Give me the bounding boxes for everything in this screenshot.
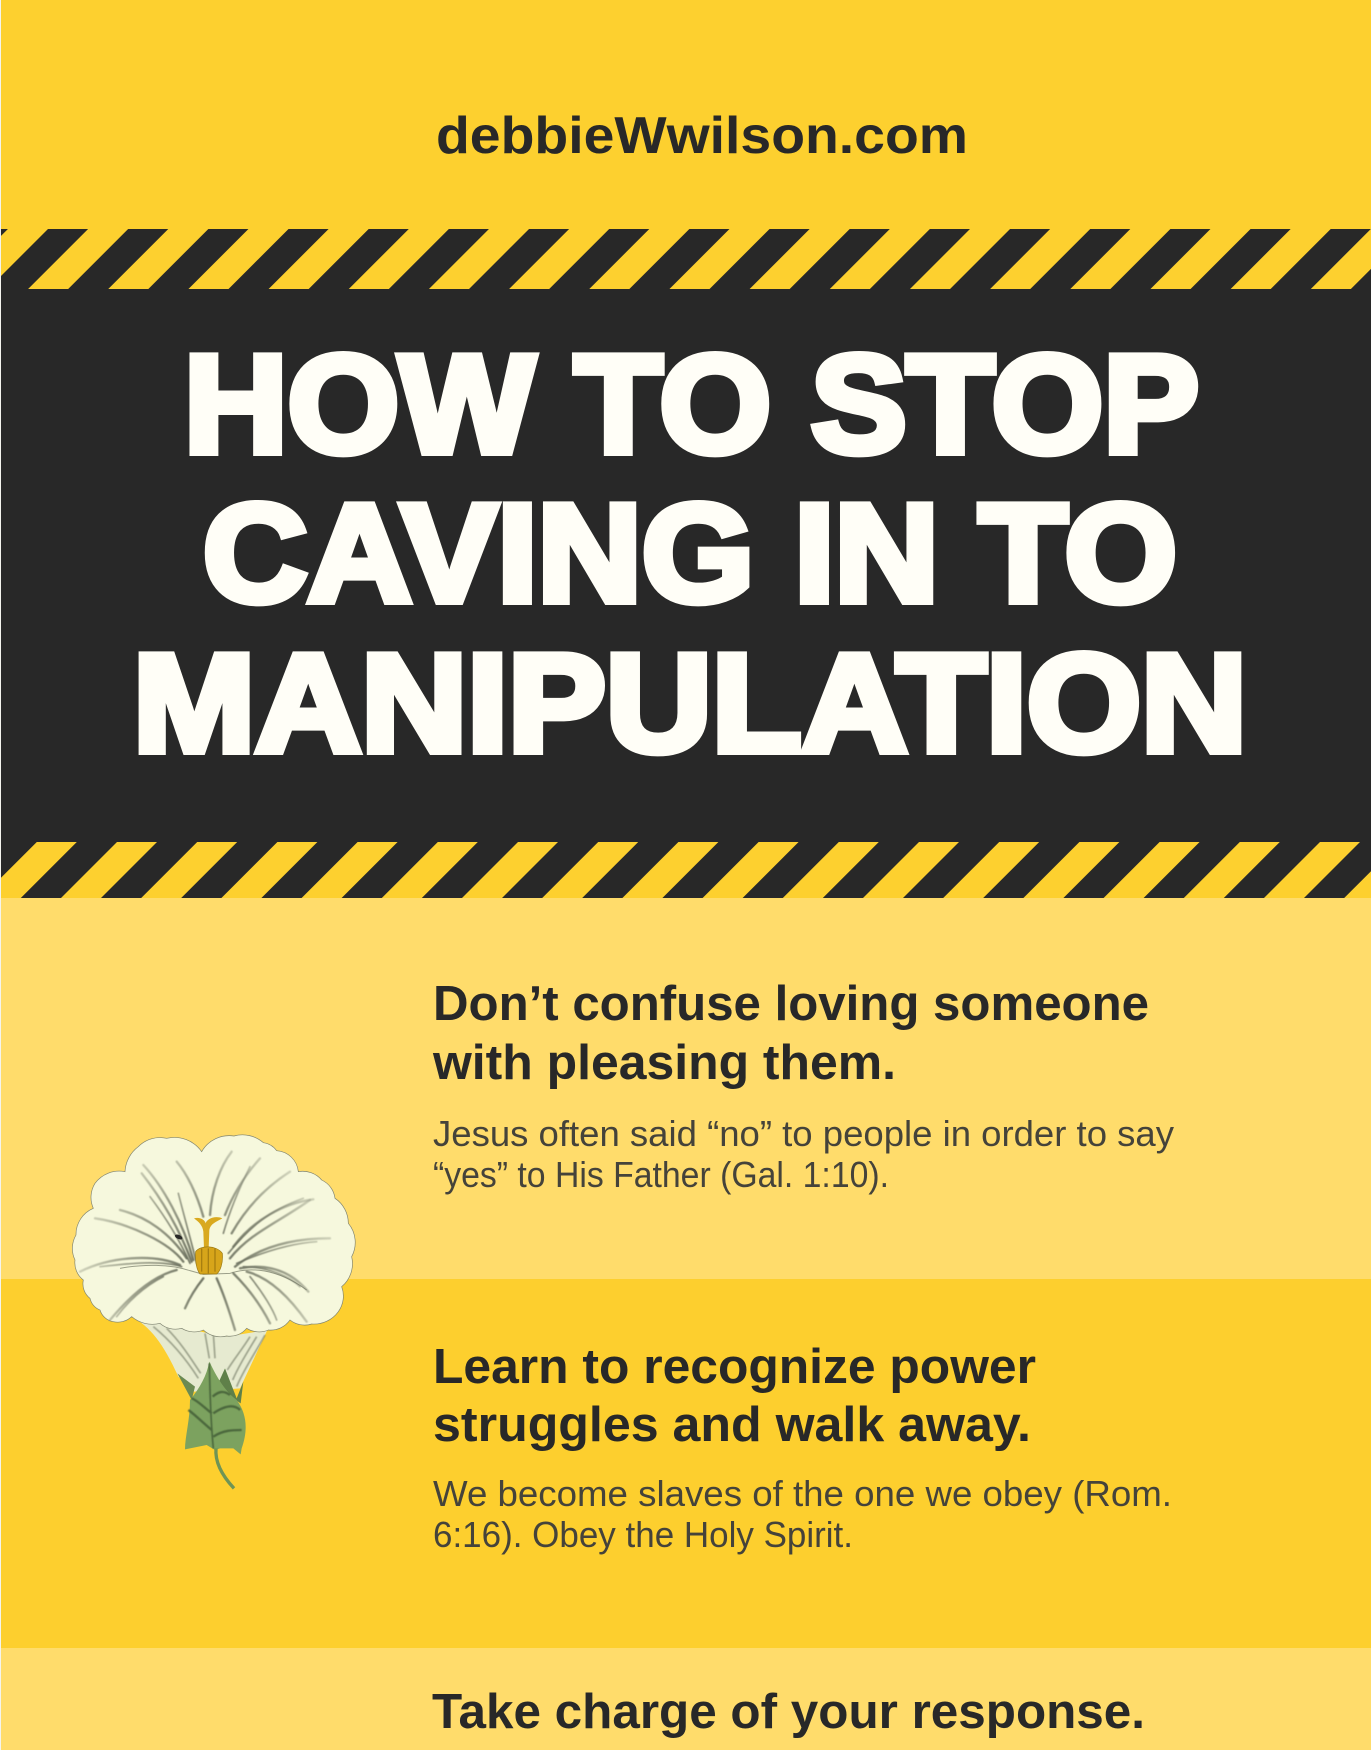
icon: white flower illustration (72, 1135, 355, 1488)
section three heading: Take charge of your response. (432, 1685, 1145, 1739)
panel: title band (0, 229, 1371, 842)
petal veins (80, 1152, 330, 1330)
section two heading: struggles and walk away. (433, 1398, 1031, 1452)
section two heading (433, 1340, 1036, 1452)
flower petals (72, 1135, 355, 1337)
left edge line (0, 0, 1, 1750)
section two body (433, 1473, 1172, 1555)
panel: section three background (0, 1648, 1371, 1750)
flower tube (132, 1317, 267, 1392)
title: MANIPULATION (133, 626, 1247, 781)
section one heading: Don’t confuse loving someone (433, 977, 1149, 1031)
title: HOW TO STOP (184, 327, 1199, 482)
section two text (433, 1340, 1172, 1555)
section one heading (432, 977, 1149, 1090)
bottom hazard stripes (0, 842, 1371, 898)
section one heading: with pleasing them. (432, 1036, 896, 1090)
throat edge line (120, 1265, 307, 1290)
section one body: “yes” to His Father (Gal. 1:10). (433, 1154, 889, 1195)
website address: debbieWwilson.com (436, 107, 968, 165)
title: CAVING IN TO (203, 476, 1177, 631)
section one body (433, 1113, 1174, 1195)
section one body: Jesus often said “no” to people in order to say (433, 1113, 1174, 1154)
top hazard stripes (0, 229, 1371, 289)
section two heading: Learn to recognize power (433, 1340, 1036, 1394)
small black insect (174, 1233, 183, 1241)
stamen (194, 1217, 223, 1274)
green sepals and leaf (177, 1362, 246, 1488)
section two body: We become slaves of the one we obey (Rom. (433, 1473, 1172, 1514)
panel: section two background (0, 1279, 1371, 1648)
title (133, 327, 1247, 781)
panel: section one background (0, 898, 1371, 1279)
section two body: 6:16). Obey the Holy Spirit. (433, 1514, 853, 1555)
section one text (432, 977, 1174, 1195)
